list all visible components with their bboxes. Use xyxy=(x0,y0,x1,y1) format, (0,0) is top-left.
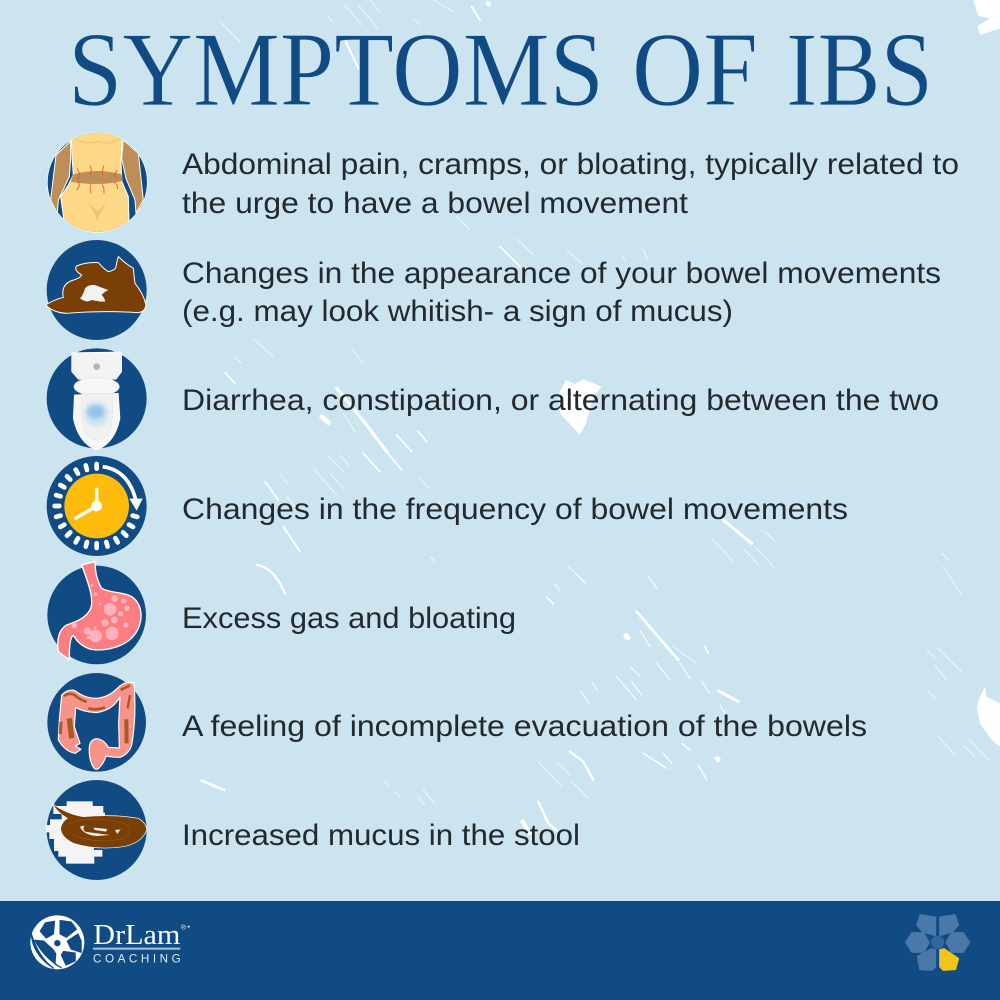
logo wordmark: DrLam xyxy=(93,919,180,951)
icon: six-petal flower xyxy=(906,915,969,970)
symptom text: diarrhea: Diarrhea, constipation, or alternating between the two xyxy=(182,384,939,417)
symptom text: appearance changes: (e.g. may look whitish- a sign of mucus) xyxy=(182,295,733,328)
symptom text: frequency: Changes in the frequency of bowel movements xyxy=(182,493,848,526)
symptom text: appearance changes xyxy=(182,257,941,328)
symptom text: abdominal pain: the urge to have a bowel movement xyxy=(182,187,689,220)
footer band xyxy=(0,901,1000,1000)
symptom text: incomplete evacuation: A feeling of incomplete evacuation of the bowels xyxy=(182,710,867,743)
symptom text: mucus: Increased mucus in the stool xyxy=(182,819,580,852)
title: IBS xyxy=(786,11,933,128)
logo wordmark xyxy=(93,919,190,965)
symptom text: abdominal pain: Abdominal pain, cramps, or bloating, typically related to xyxy=(182,148,959,181)
icon: stomach xyxy=(47,562,146,664)
symptom text: gas: Excess gas and bloating xyxy=(182,602,516,635)
icon: clock xyxy=(47,456,147,556)
logo mark xyxy=(30,915,84,969)
title: OF xyxy=(632,11,758,128)
icon: stool with whitish patch xyxy=(46,240,147,340)
icon: stool with mucus xyxy=(46,780,147,880)
title xyxy=(68,11,933,128)
logo wordmark: ® xyxy=(181,923,186,931)
icon: abdomen xyxy=(47,128,148,235)
title: SYMPTOMS xyxy=(68,11,604,128)
icon: colon xyxy=(47,673,146,772)
background white scratches xyxy=(202,0,1000,833)
logo wordmark: COACHING xyxy=(93,952,181,965)
symptom text: abdominal pain xyxy=(182,148,959,220)
icon: toilet xyxy=(47,348,147,450)
symptom text: appearance changes: Changes in the appearance of your bowel movements xyxy=(182,257,941,290)
